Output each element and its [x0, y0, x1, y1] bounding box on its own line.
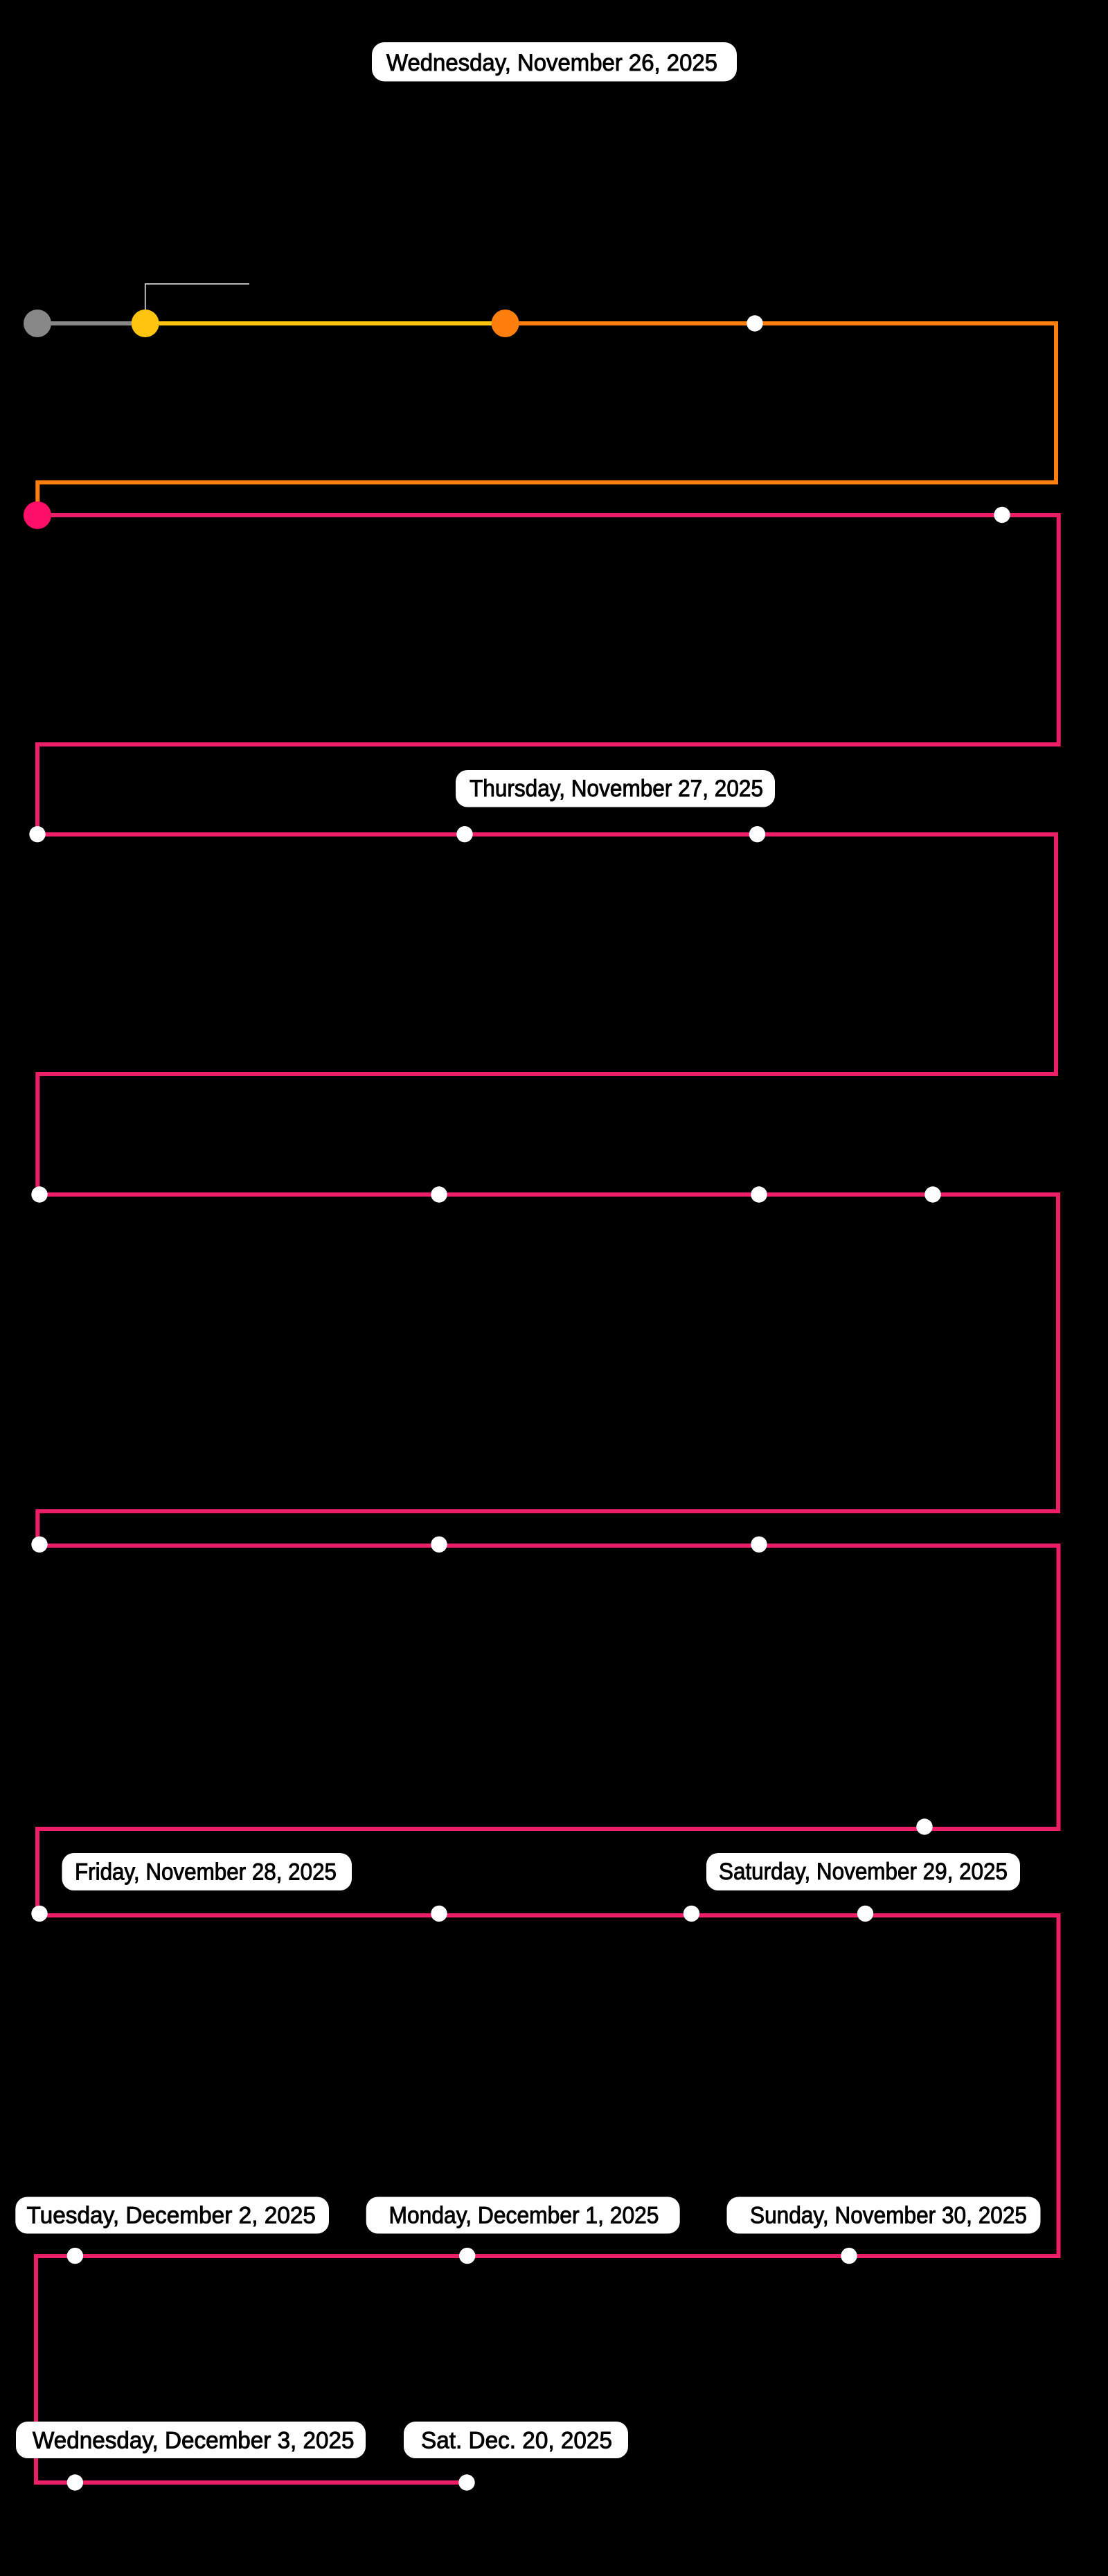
date label: Wednesday, November 26, 2025: [372, 42, 737, 82]
date label: Sat. Dec. 20, 2025: [404, 2422, 628, 2458]
date label: Saturday, November 29, 2025: Saturday, November 29, 2025: [719, 1859, 1008, 1885]
date label: Friday, November 28, 2025: [62, 1853, 352, 1890]
stage marker: pink: [24, 501, 51, 529]
stage marker: gray: [24, 310, 51, 337]
yellow segment: [145, 321, 506, 325]
date label: Monday, December 1, 2025: [366, 2197, 680, 2234]
callout leader line: [145, 284, 249, 310]
date label: Thursday, November 27, 2025: [456, 770, 775, 807]
date label: Tuesday, December 2, 2025: [15, 2197, 329, 2234]
date label: Sunday, November 30, 2025: Sunday, November 30, 2025: [750, 2202, 1027, 2228]
orange path: [37, 323, 1056, 515]
date label: Sunday, November 30, 2025: [727, 2197, 1040, 2234]
date label: Monday, December 1, 2025: Monday, December 1, 2025: [389, 2202, 659, 2228]
date label: Saturday, November 29, 2025: [706, 1853, 1020, 1890]
stage marker: orange: [492, 310, 519, 337]
pink path: [36, 515, 1059, 2483]
gray segment: [37, 321, 145, 325]
event dots: [29, 315, 1010, 2491]
date label: Wednesday, December 3, 2025: [16, 2422, 366, 2458]
date label: Wednesday, November 26, 2025: Wednesday, November 26, 2025: [386, 50, 717, 76]
date label: Wednesday, December 3, 2025: Wednesday, December 3, 2025: [33, 2427, 355, 2453]
date label: Thursday, November 27, 2025: Thursday, November 27, 2025: [470, 776, 763, 802]
date label: Tuesday, December 2, 2025: Tuesday, December 2, 2025: [26, 2202, 316, 2228]
stage marker: yellow: [132, 310, 159, 337]
date label: Friday, November 28, 2025: Friday, November 28, 2025: [75, 1859, 337, 1885]
date label: Sat. Dec. 20, 2025: Sat. Dec. 20, 2025: [421, 2427, 612, 2453]
